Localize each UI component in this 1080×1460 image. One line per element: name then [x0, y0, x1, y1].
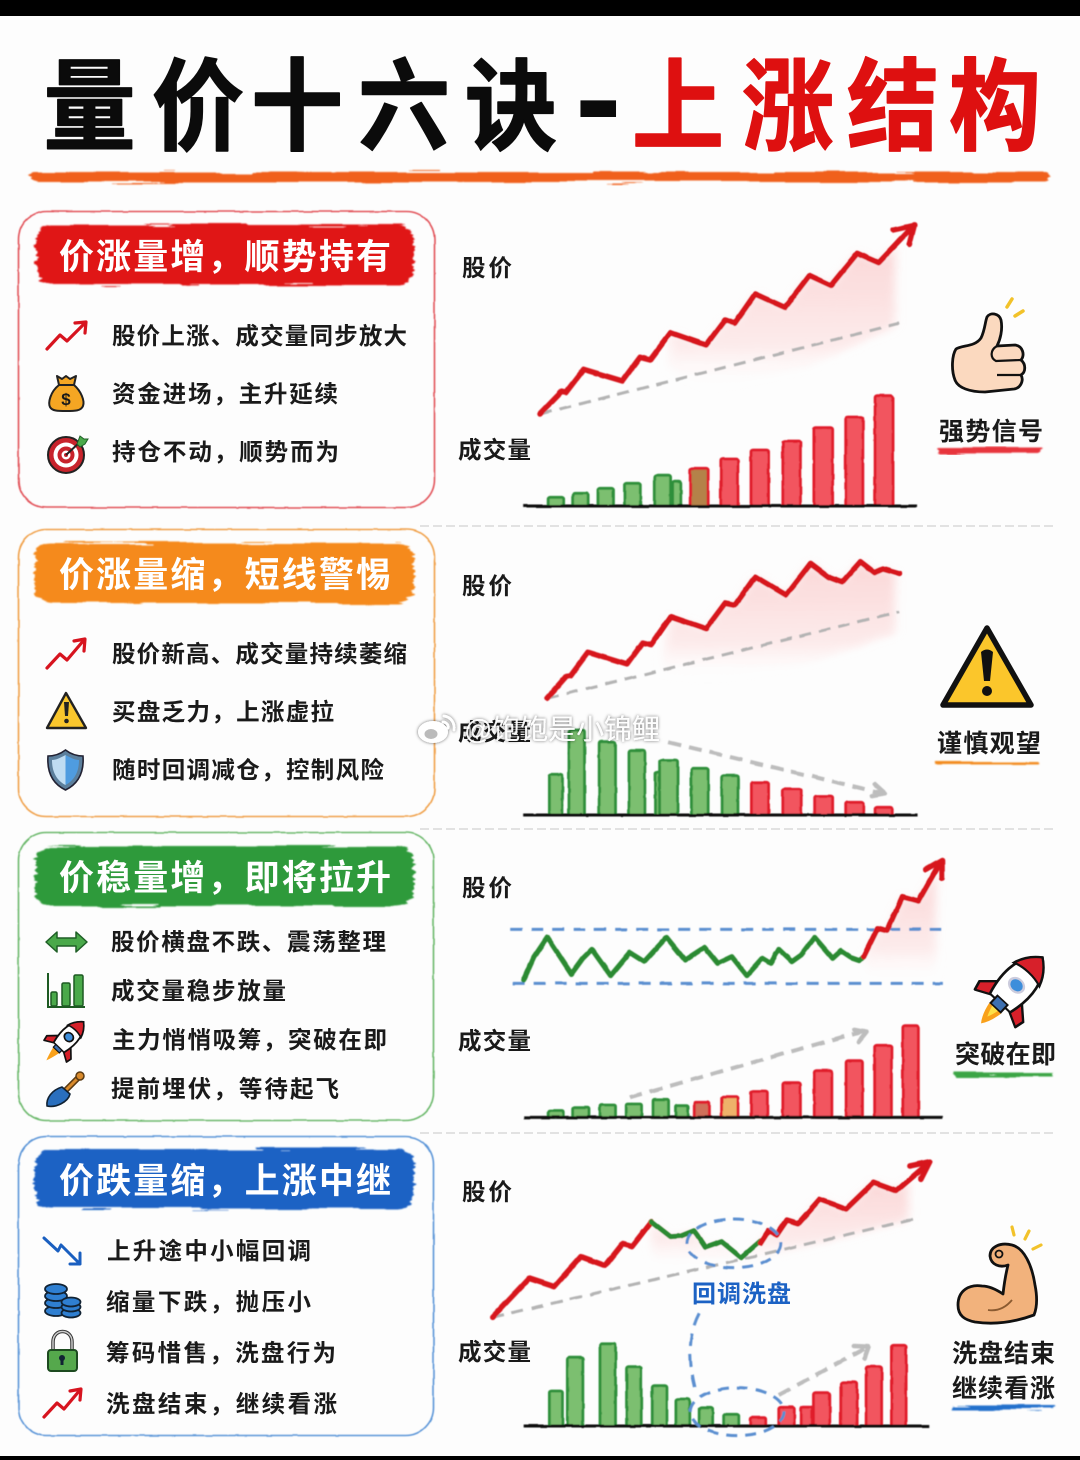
price line and bars: [510, 860, 943, 1117]
panel: 价稳量增: [18, 832, 434, 1120]
watermark: [418, 714, 660, 745]
bullet text: 股价横盘不跌、震荡整理: [111, 929, 386, 955]
price line and bars: [524, 562, 918, 815]
bullet text: 成交量稳步放量: [111, 977, 286, 1004]
bullet text: 买盘乏力，上涨虚拉: [112, 698, 334, 725]
verdict label: 谨慎观望: [937, 730, 1041, 758]
chart: 价跌量缩 price and volume: [458, 1162, 930, 1436]
panel heading brush: [36, 225, 414, 285]
verdict underline: [954, 1072, 1054, 1077]
icon: target: [48, 436, 88, 473]
icon: weibo logo: [418, 716, 454, 743]
icon: flexed arm: [958, 1227, 1041, 1323]
panel: 价涨量增: [18, 212, 434, 508]
chart: 价稳量增 price and volume: [458, 860, 943, 1117]
panel heading: 价涨量缩，短线警惕: [59, 556, 391, 595]
icon: down arrow: [44, 1238, 80, 1264]
bullet text: 主力悄悄吸筹，突破在即: [112, 1027, 387, 1053]
icon: money bag: $: [61, 390, 71, 409]
chart: 价涨量缩 price and volume: [458, 562, 918, 815]
volume label: 成交量: [458, 1338, 531, 1365]
price label: 股价: [462, 255, 512, 281]
price label: 股价: [462, 1179, 512, 1205]
price line and bars: [524, 225, 918, 506]
verdict underline: [937, 448, 1041, 453]
bullet text: 提前埋伏，等待起飞: [111, 1076, 339, 1102]
panel heading brush: [35, 1149, 414, 1209]
icon: shovel: [47, 1072, 84, 1106]
bullet text: 筹码惜售，洗盘行为: [106, 1340, 336, 1366]
watermark text: @饱饱是小锦鲤: [464, 714, 660, 745]
verdict underline: [951, 1405, 1054, 1410]
icon: thumbs up: [952, 299, 1025, 392]
icon: horizontal double arrow: [46, 932, 87, 952]
icon: shield: [48, 750, 83, 790]
volume label: 成交量: [458, 436, 531, 463]
panel heading: 价涨量增，顺势持有: [59, 238, 391, 277]
volume label: 成交量: [458, 718, 531, 745]
icon: warning: [47, 693, 86, 728]
pullback label: 回调洗盘: [692, 1281, 791, 1308]
price label: 股价: [462, 875, 512, 901]
icon: up arrow: [47, 639, 85, 668]
title: 量价十六诀: [44, 52, 557, 164]
icon: rocket: [959, 937, 1064, 1044]
title: -: [575, 18, 622, 175]
verdict underline: [935, 761, 1040, 766]
title underline brush: [31, 172, 1049, 182]
bullet text: 上升途中小幅回调: [107, 1237, 311, 1264]
icon: bar chart: [48, 973, 85, 1007]
panel heading: 价跌量缩，上涨中继: [59, 1162, 391, 1201]
volume label: 成交量: [458, 1027, 531, 1054]
bullet text: 缩量下跌，抛压小: [106, 1289, 312, 1315]
chart: 价涨量增 price and volume: [458, 225, 918, 506]
bullet text: 持仓不动，顺势而为: [112, 439, 339, 465]
title: 上涨结构: [632, 52, 1041, 164]
icon: rocket: [34, 1010, 96, 1072]
panel: 价涨量缩: [18, 530, 434, 816]
title: [44, 18, 1041, 175]
price line and bars: [492, 1162, 930, 1436]
icon: coin stacks: [45, 1284, 80, 1318]
panel heading brush: [35, 846, 414, 906]
verdict label: 突破在即: [955, 1041, 1056, 1069]
bullet text: 股价上涨、成交量同步放大: [112, 322, 407, 349]
bullet text: 资金进场，主升延续: [112, 380, 338, 407]
icon: up arrow: [47, 322, 86, 349]
icon: money bag: [49, 376, 84, 411]
panel: 价跌量缩: [18, 1136, 434, 1436]
icon: padlock: [48, 1332, 77, 1371]
verdict label: 洗盘结束: [952, 1340, 1055, 1368]
bullet text: 股价新高、成交量持续萎缩: [112, 640, 407, 667]
verdict label: 强势信号: [939, 418, 1043, 446]
bullet text: 随时回调减仓，控制风险: [112, 757, 384, 783]
bullet text: 洗盘结束，继续看涨: [106, 1391, 337, 1417]
panel heading: 价稳量增，即将拉升: [59, 859, 391, 898]
icon: up arrow: [44, 1389, 81, 1417]
verdict label: 继续看涨: [952, 1375, 1055, 1403]
panel heading brush: [35, 543, 414, 603]
price label: 股价: [462, 573, 512, 599]
icon: warning triangle: [943, 628, 1031, 705]
